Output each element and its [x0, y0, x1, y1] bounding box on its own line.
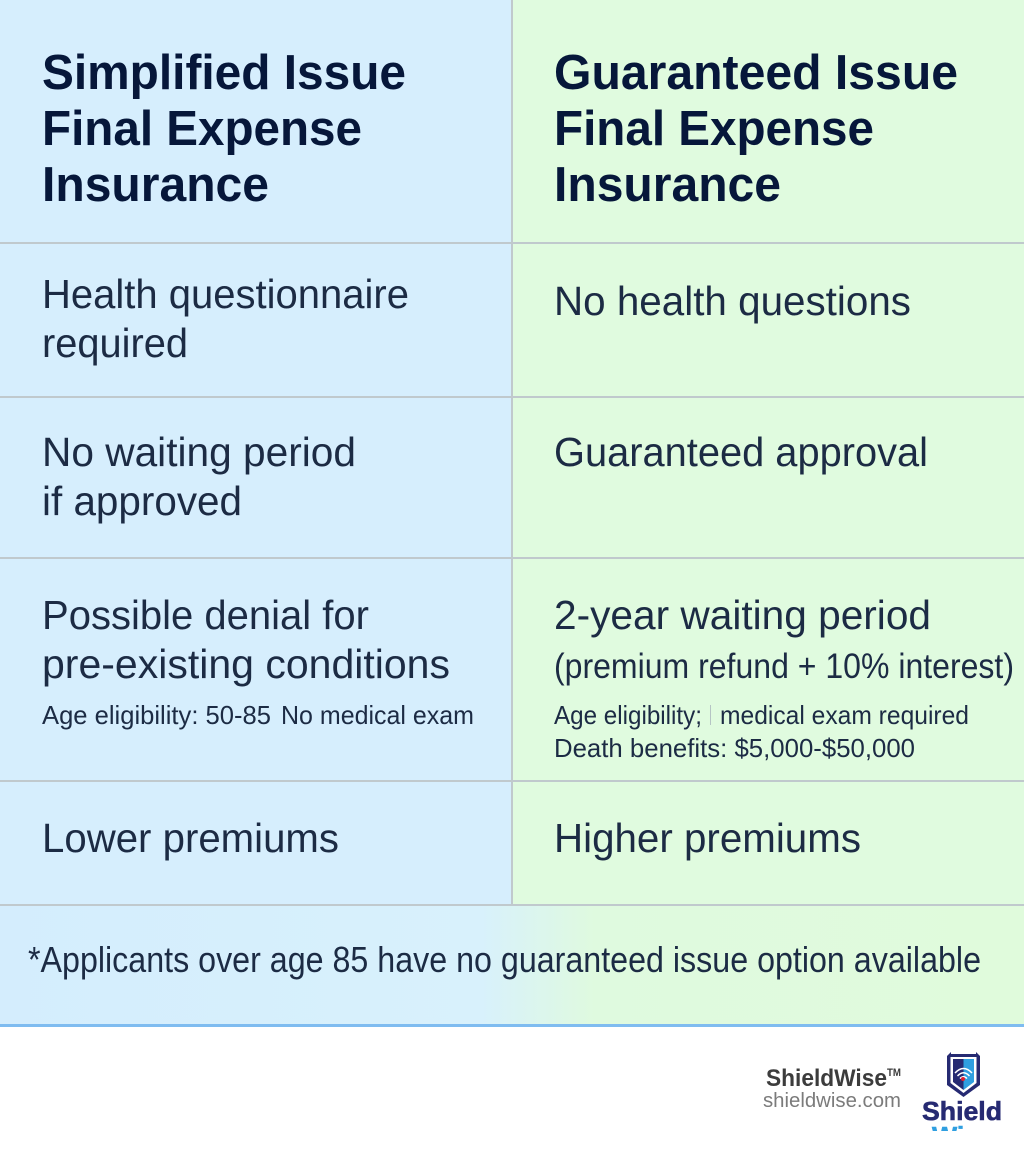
heading: guaranteed issue: Guaranteed Issue [554, 46, 958, 100]
brand name and url [763, 1065, 901, 1112]
text: no waiting period: No waiting period [42, 429, 356, 475]
heading: guaranteed issue: Final Expense [554, 102, 874, 156]
heading: simplified issue: Insurance [42, 158, 269, 212]
logo: shieldwise shield: Shield [922, 1096, 1002, 1126]
text: higher premiums: Higher premiums [554, 815, 861, 861]
text: possible denial: Possible denial for [42, 592, 369, 638]
text: age eligibility and exam: No medical exam [281, 700, 474, 730]
text: eligibility and death benefits: medical exam required [720, 700, 969, 730]
text: eligibility and death benefits: Age eligibility; [554, 700, 702, 730]
text: possible denial [42, 592, 450, 687]
text: eligibility and death benefits: Death benefits: $5,000-$50,000 [554, 733, 915, 763]
text: age eligibility and exam: Age eligibility: 50-85 [42, 700, 271, 730]
text: health questionnaire: required [42, 320, 188, 366]
text: health questionnaire [42, 271, 409, 366]
text: no health questions: No health questions [554, 278, 911, 324]
panel: footnote band [0, 905, 1024, 1024]
heading: guaranteed issue: Insurance [554, 158, 781, 212]
text: no waiting period: if approved [42, 478, 242, 524]
text: eligibility and death benefits [554, 700, 969, 763]
heading: simplified issue: Final Expense [42, 102, 362, 156]
text: age eligibility and exam [42, 700, 474, 730]
logo: shieldwise shield [922, 1052, 1001, 1131]
text: no waiting period [42, 429, 356, 524]
heading: simplified issue [42, 46, 406, 212]
panel: simplified issue column [0, 0, 512, 905]
text: lower premiums: Lower premiums [42, 815, 339, 861]
brand name and url: ShieldWise [766, 1065, 887, 1092]
text: waiting period: 2-year waiting period [554, 592, 931, 638]
text: health questionnaire: Health questionnaire [42, 271, 409, 317]
panel: guaranteed issue column [512, 0, 1024, 905]
heading: simplified issue: Simplified Issue [42, 46, 406, 100]
heading: guaranteed issue [554, 46, 958, 212]
brand name and url: TM [887, 1067, 901, 1079]
text: guaranteed approval: Guaranteed approval [554, 429, 928, 475]
logo: shieldwise shield: Wise [932, 1121, 994, 1151]
text: waiting period [554, 592, 1014, 686]
brand name and url: shieldwise.com [763, 1090, 901, 1112]
text: possible denial: pre-existing conditions [42, 641, 450, 687]
